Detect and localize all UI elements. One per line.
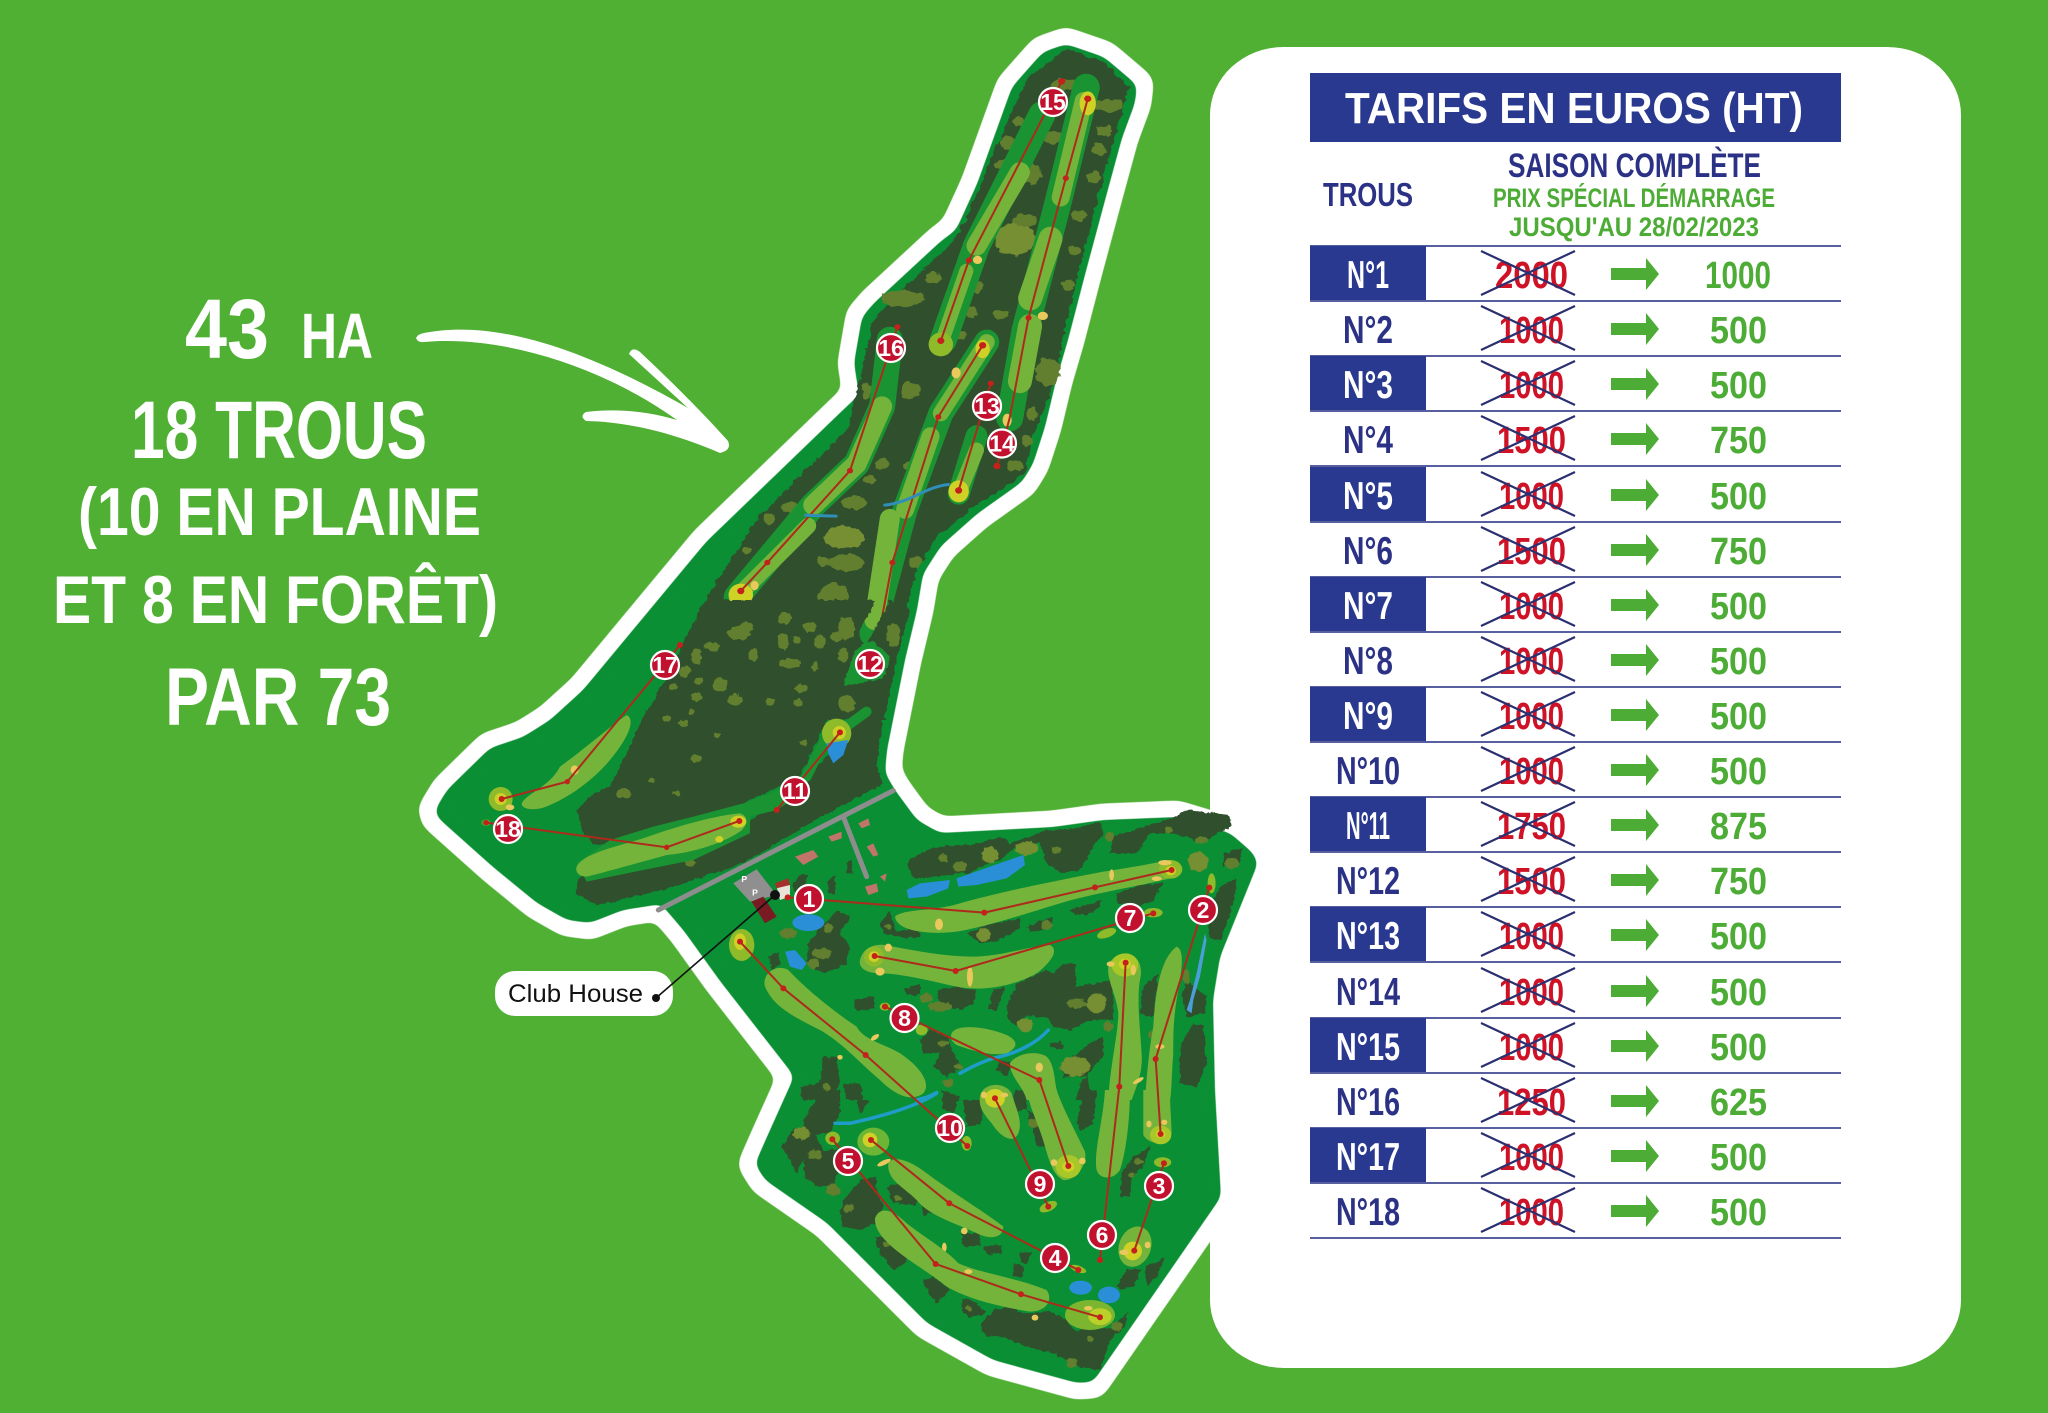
row 8 xyxy=(1310,637,1841,687)
row 11: 875 xyxy=(1710,806,1767,848)
column head: saison: JUSQU'AU 28/02/2023 xyxy=(1509,212,1759,242)
badge 11: 11 xyxy=(783,778,807,804)
row 3 xyxy=(1310,356,1841,411)
row 5 xyxy=(1310,467,1841,522)
row 12 xyxy=(1310,857,1841,907)
row 5: 1000 xyxy=(1499,476,1564,518)
row 18: N°18 xyxy=(1336,1191,1400,1234)
row 17: 500 xyxy=(1710,1137,1767,1179)
row 1: 2000 xyxy=(1495,255,1568,297)
table heading: tarifs xyxy=(1310,73,1841,142)
table top rule xyxy=(1310,245,1841,247)
access road xyxy=(658,791,893,910)
row 4: N°4 xyxy=(1343,419,1393,462)
row 6: N°6 xyxy=(1343,530,1393,573)
row 2: 500 xyxy=(1710,310,1767,352)
row 2 xyxy=(1310,306,1841,356)
tree masses north xyxy=(768,810,1242,1100)
row 17: 1000 xyxy=(1499,1137,1564,1179)
row 5: 500 xyxy=(1710,476,1767,518)
badge 6: 6 xyxy=(1096,1222,1108,1248)
row 7: N°7 xyxy=(1343,585,1393,628)
row 16: 625 xyxy=(1710,1082,1767,1124)
arrow: facts to map xyxy=(416,330,729,453)
hole 18 xyxy=(481,777,807,882)
badge 5: 5 xyxy=(842,1148,855,1174)
streams upper xyxy=(806,484,948,516)
hole 3 xyxy=(1113,1157,1171,1272)
row 3: 1000 xyxy=(1499,365,1564,407)
parking and club house buildings: P xyxy=(752,887,758,897)
badge 3: 3 xyxy=(1153,1173,1165,1199)
parking and club house buildings: P xyxy=(741,874,747,884)
row 8: N°8 xyxy=(1343,640,1393,683)
badge 2 xyxy=(1189,896,1217,924)
row 15: 1000 xyxy=(1499,1027,1564,1069)
row 14: 1000 xyxy=(1499,972,1564,1014)
tree masses south xyxy=(782,1090,1165,1370)
badge 17: 17 xyxy=(652,652,678,678)
hole 16 xyxy=(729,324,901,606)
row 13: 1000 xyxy=(1499,916,1564,958)
hole 14 xyxy=(993,87,1096,469)
row 1: 1000 xyxy=(1705,255,1771,297)
tree highlights lower xyxy=(616,612,900,867)
row 16 xyxy=(1310,1078,1841,1128)
row 9: 500 xyxy=(1710,696,1767,738)
ponds and streams xyxy=(785,855,1207,1303)
row 11: N°11 xyxy=(1346,805,1390,848)
row 6: 1500 xyxy=(1497,531,1566,573)
badge 9: 9 xyxy=(1034,1171,1046,1197)
map: forest section lower xyxy=(481,600,910,923)
hole 13 xyxy=(948,381,994,502)
badge 13: 13 xyxy=(974,393,1000,419)
row 10 xyxy=(1310,747,1841,797)
row 15 xyxy=(1310,1018,1841,1073)
text: course facts: (10 EN PLAINE xyxy=(78,474,481,550)
hole number badges xyxy=(494,88,1217,1272)
hole 11 xyxy=(774,712,867,813)
row 7 xyxy=(1310,577,1841,632)
callout: club house: Club House xyxy=(508,980,643,1008)
row 3: 500 xyxy=(1710,365,1767,407)
map outline xyxy=(435,44,1258,1383)
column head: saison xyxy=(1493,147,1775,242)
row 6: 750 xyxy=(1710,531,1767,573)
badge 8: 8 xyxy=(898,1005,911,1031)
row 1: N°1 xyxy=(1347,254,1389,297)
forest mass lower xyxy=(575,600,910,905)
row 10: 1000 xyxy=(1499,751,1564,793)
map: forest section upper xyxy=(645,48,1130,720)
tree highlights plain xyxy=(780,827,1238,1368)
column head: saison: SAISON COMPLÈTE xyxy=(1508,147,1761,185)
row 16: N°16 xyxy=(1336,1081,1400,1124)
badge 14: 14 xyxy=(989,430,1015,456)
row 13: N°13 xyxy=(1336,915,1400,958)
badge 18: 18 xyxy=(495,816,521,842)
row 14 xyxy=(1310,968,1841,1018)
row 13: 500 xyxy=(1710,916,1767,958)
hole 17 xyxy=(489,642,683,811)
hole 5 xyxy=(825,1132,1115,1330)
rough around hole 12 tee xyxy=(843,640,890,685)
row 12: 750 xyxy=(1710,861,1767,903)
row 3: N°3 xyxy=(1343,364,1393,407)
text: course facts: 18 TROUS xyxy=(131,385,427,476)
badge 5 xyxy=(834,1147,862,1175)
callout: club house xyxy=(495,890,780,1016)
hole 7 xyxy=(860,908,1163,989)
badge 4: 4 xyxy=(1049,1245,1062,1271)
row 8: 1000 xyxy=(1499,641,1564,683)
hole 4 xyxy=(857,1128,1087,1275)
hole 12 xyxy=(862,340,990,692)
tree highlights upper xyxy=(679,79,1123,709)
text: course facts: PAR 73 xyxy=(165,652,391,743)
map lawn xyxy=(435,44,1258,1383)
row 5: N°5 xyxy=(1343,475,1393,518)
badge 2: 2 xyxy=(1197,897,1209,923)
panel: pricing card xyxy=(1210,47,1961,1368)
row 7: 1000 xyxy=(1499,586,1564,628)
row 12: 1500 xyxy=(1497,861,1566,903)
hole 6 xyxy=(1096,953,1144,1263)
column head: saison: PRIX SPÉCIAL DÉMARRAGE xyxy=(1493,182,1775,213)
row 10: N°10 xyxy=(1336,750,1400,793)
row 15: N°15 xyxy=(1336,1026,1400,1069)
badge 7: 7 xyxy=(1124,905,1136,931)
column head: trous: TROUS xyxy=(1323,176,1413,213)
hole 1 xyxy=(785,860,1182,933)
badge 7 xyxy=(1116,904,1144,932)
text: course facts: ET 8 EN FORÊT) xyxy=(53,561,498,638)
row 16: 1250 xyxy=(1497,1082,1566,1124)
table heading: tarifs: TARIFS EN EUROS (HT) xyxy=(1345,84,1803,133)
row 18: 500 xyxy=(1710,1192,1767,1234)
row 8: 500 xyxy=(1710,641,1767,683)
row 9: 1000 xyxy=(1499,696,1564,738)
row 1 xyxy=(1310,246,1841,301)
row 2: 1000 xyxy=(1499,310,1564,352)
hole 10 xyxy=(729,929,972,1151)
text: course facts: HA xyxy=(301,300,373,372)
row 2: N°2 xyxy=(1343,309,1393,352)
parking and club house buildings xyxy=(733,869,790,923)
badge 12: 12 xyxy=(857,651,883,677)
map: plain section xyxy=(729,810,1242,1370)
badge 1 xyxy=(795,885,823,913)
row 17: N°17 xyxy=(1336,1136,1400,1179)
row 18: 1000 xyxy=(1499,1192,1564,1234)
row 7: 500 xyxy=(1710,586,1767,628)
row 18 xyxy=(1310,1188,1841,1238)
forest mass upper xyxy=(645,48,1130,720)
badge 3 xyxy=(1145,1172,1173,1200)
row 4: 1500 xyxy=(1497,420,1566,462)
row 14: N°14 xyxy=(1336,971,1400,1014)
badge 15: 15 xyxy=(1040,89,1066,115)
row 11 xyxy=(1310,797,1841,852)
row 9: N°9 xyxy=(1343,695,1393,738)
row 6 xyxy=(1310,527,1841,577)
row 14: 500 xyxy=(1710,972,1767,1014)
row 11: 1750 xyxy=(1497,806,1566,848)
badge 8 xyxy=(890,1004,918,1032)
hole 8 xyxy=(880,1003,1086,1180)
row 4 xyxy=(1310,416,1841,466)
badge 1: 1 xyxy=(803,886,816,912)
hole 9 xyxy=(980,1085,1059,1215)
hole 2 xyxy=(1143,873,1216,1144)
roofs xyxy=(795,818,887,895)
badge 6 xyxy=(1088,1221,1116,1249)
text: course facts: 43 xyxy=(185,282,269,376)
text: course facts xyxy=(53,282,498,743)
row 17 xyxy=(1310,1128,1841,1183)
row 9 xyxy=(1310,687,1841,742)
row 10: 500 xyxy=(1710,751,1767,793)
row 15: 500 xyxy=(1710,1027,1767,1069)
badge 9 xyxy=(1026,1170,1054,1198)
row 13 xyxy=(1310,907,1841,962)
row 4: 750 xyxy=(1710,420,1767,462)
badge 10: 10 xyxy=(937,1115,963,1141)
badge 4 xyxy=(1041,1244,1069,1272)
row 12: N°12 xyxy=(1336,860,1400,903)
badge 16: 16 xyxy=(878,335,904,361)
hole 15 xyxy=(929,78,1065,356)
